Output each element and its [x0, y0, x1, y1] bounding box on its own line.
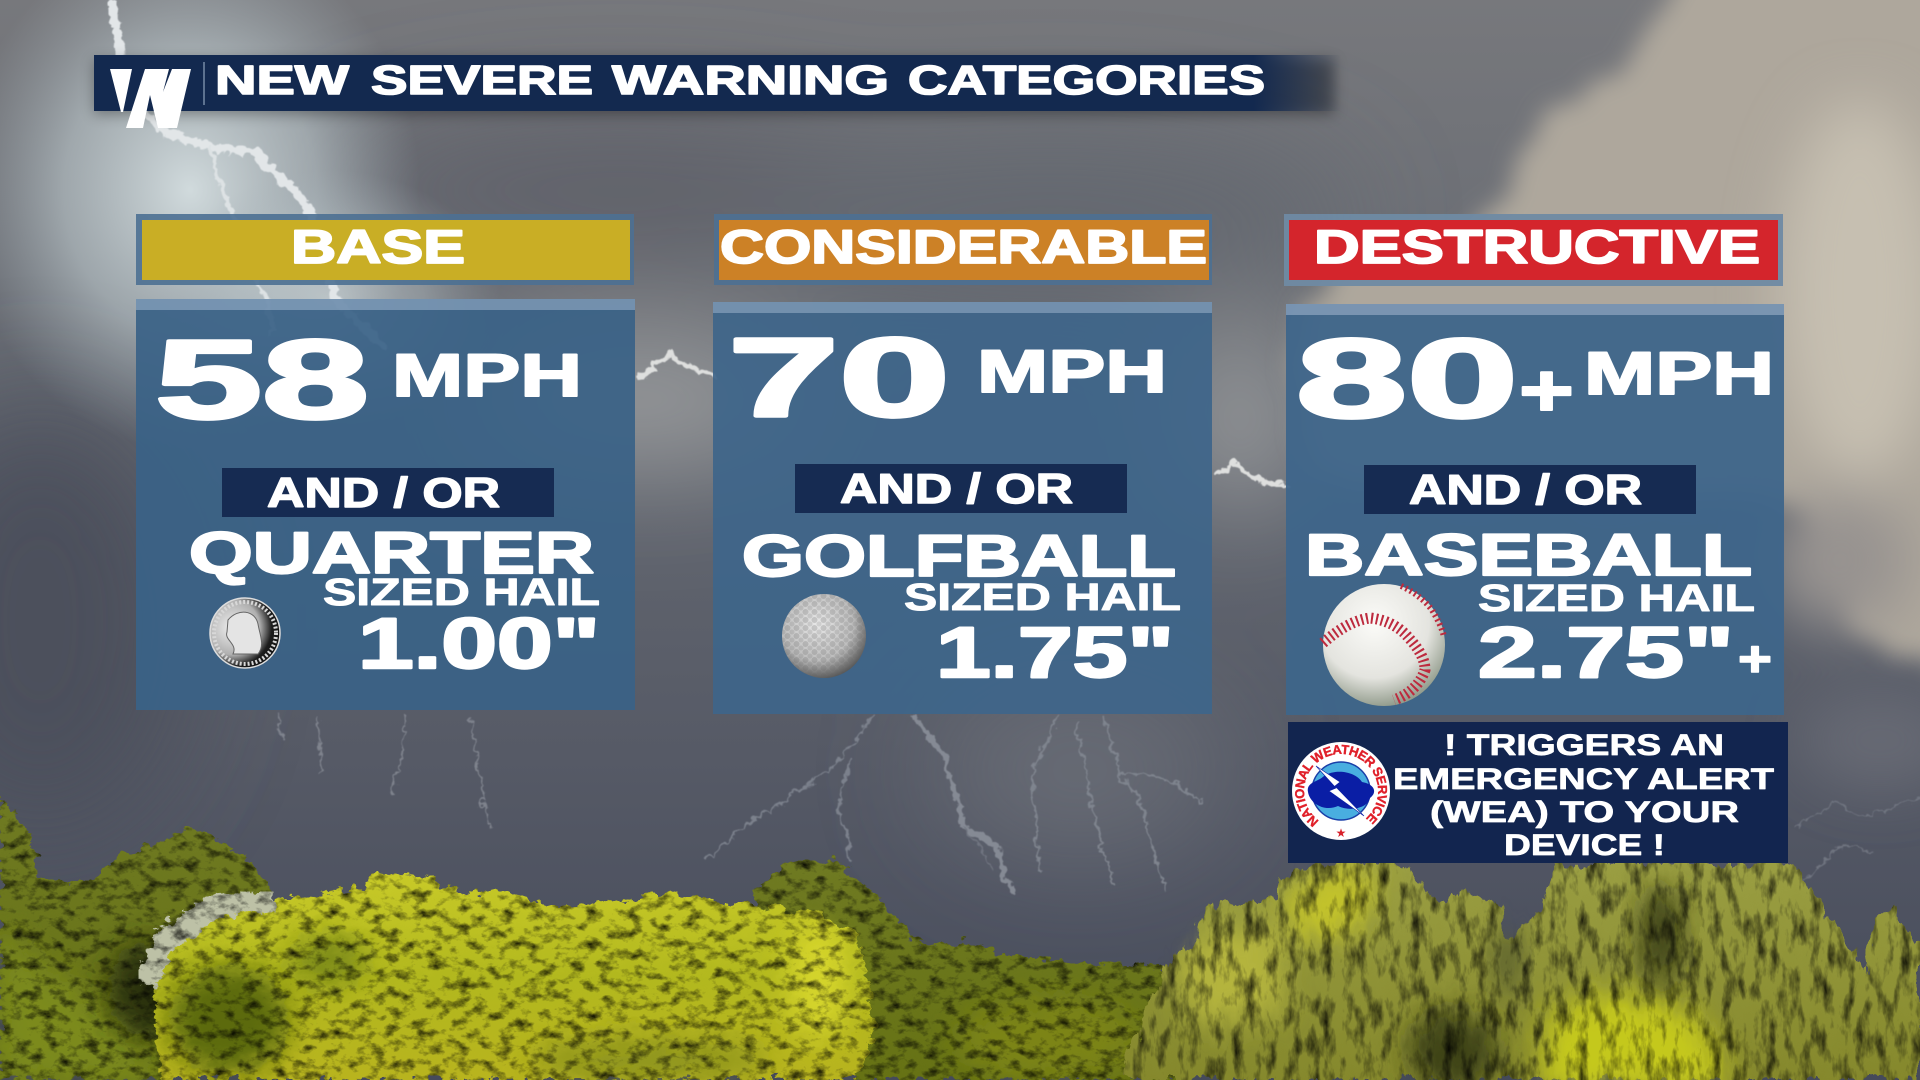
card strip	[713, 302, 1212, 313]
and/or badge: AND / OR	[267, 469, 500, 516]
wind speed: +	[1519, 349, 1574, 432]
and/or badge	[222, 468, 554, 517]
icon: NWS logo: NATIONAL WEATHER SERVICE	[1294, 744, 1388, 828]
wind speed	[1296, 316, 1774, 441]
icon: NWS logo: ★	[1336, 826, 1346, 840]
header: considerable	[714, 214, 1212, 285]
wind speed: 80	[1296, 316, 1518, 441]
hail label: +	[1738, 631, 1772, 687]
wind speed: MPH	[977, 338, 1167, 405]
hail label: 1.00"	[358, 605, 600, 684]
title text: CATEGORIES	[908, 57, 1265, 103]
and/or badge	[1364, 465, 1696, 514]
icon: quarter coin	[210, 598, 280, 668]
lightning bolts	[110, 0, 1920, 890]
card body	[136, 310, 635, 710]
wind speed: MPH	[392, 342, 582, 409]
separator	[203, 62, 205, 105]
card body	[713, 313, 1212, 714]
trees foreground	[0, 797, 1920, 1080]
card body	[1286, 315, 1784, 715]
header: considerable: CONSIDERABLE	[720, 220, 1207, 273]
hail label	[1305, 523, 1772, 693]
header: destructive: DESTRUCTIVE	[1314, 220, 1760, 273]
title text	[215, 57, 1265, 103]
wind speed	[155, 317, 582, 442]
header: base	[136, 214, 634, 285]
hail label: 2.75"	[1478, 614, 1734, 693]
alert text: (WEA) TO YOUR	[1430, 796, 1739, 829]
hail label	[742, 524, 1181, 693]
title text: NEW	[215, 57, 349, 103]
hail label: BASEBALL	[1305, 523, 1752, 588]
panel: base	[136, 214, 635, 710]
wind speed: 58	[155, 317, 369, 442]
hail label: GOLFBALL	[742, 524, 1176, 589]
header: base: BASE	[291, 220, 465, 273]
middle green trees	[753, 860, 1190, 1080]
wind speed: 70	[728, 315, 950, 440]
card strip	[136, 299, 635, 310]
icon: golf ball	[782, 594, 866, 678]
alert text: ! TRIGGERS AN	[1444, 729, 1724, 762]
callout: wireless emergency alert	[1288, 722, 1788, 863]
hail label: QUARTER	[189, 521, 594, 586]
left green trees	[0, 797, 290, 1080]
hail label	[189, 521, 600, 684]
icon: W logo	[110, 69, 191, 128]
wind speed	[728, 315, 1167, 440]
icon: baseball	[1323, 584, 1445, 706]
alert text	[1393, 729, 1774, 862]
title text: WARNING	[612, 57, 889, 103]
and/or badge: AND / OR	[840, 465, 1073, 512]
card strip	[1286, 304, 1784, 315]
and/or badge: AND / OR	[1409, 466, 1642, 513]
bright yellow tree	[150, 873, 874, 1080]
hail label: SIZED HAIL	[1478, 578, 1755, 620]
sage bush edge	[145, 900, 274, 985]
and/or badge	[795, 464, 1127, 513]
header: destructive	[1284, 214, 1783, 286]
title text: SEVERE	[371, 57, 593, 103]
hail label: SIZED HAIL	[323, 572, 600, 614]
hail label: 1.75"	[936, 614, 1174, 693]
right olive trees	[1120, 863, 1920, 1080]
title bar	[94, 55, 1341, 114]
hail label: SIZED HAIL	[904, 577, 1181, 619]
panel: destructive	[1284, 214, 1784, 715]
panel: considerable	[713, 214, 1212, 714]
alert text: EMERGENCY ALERT	[1393, 763, 1774, 796]
wind speed: MPH	[1584, 340, 1774, 407]
alert text: DEVICE !	[1504, 829, 1665, 862]
